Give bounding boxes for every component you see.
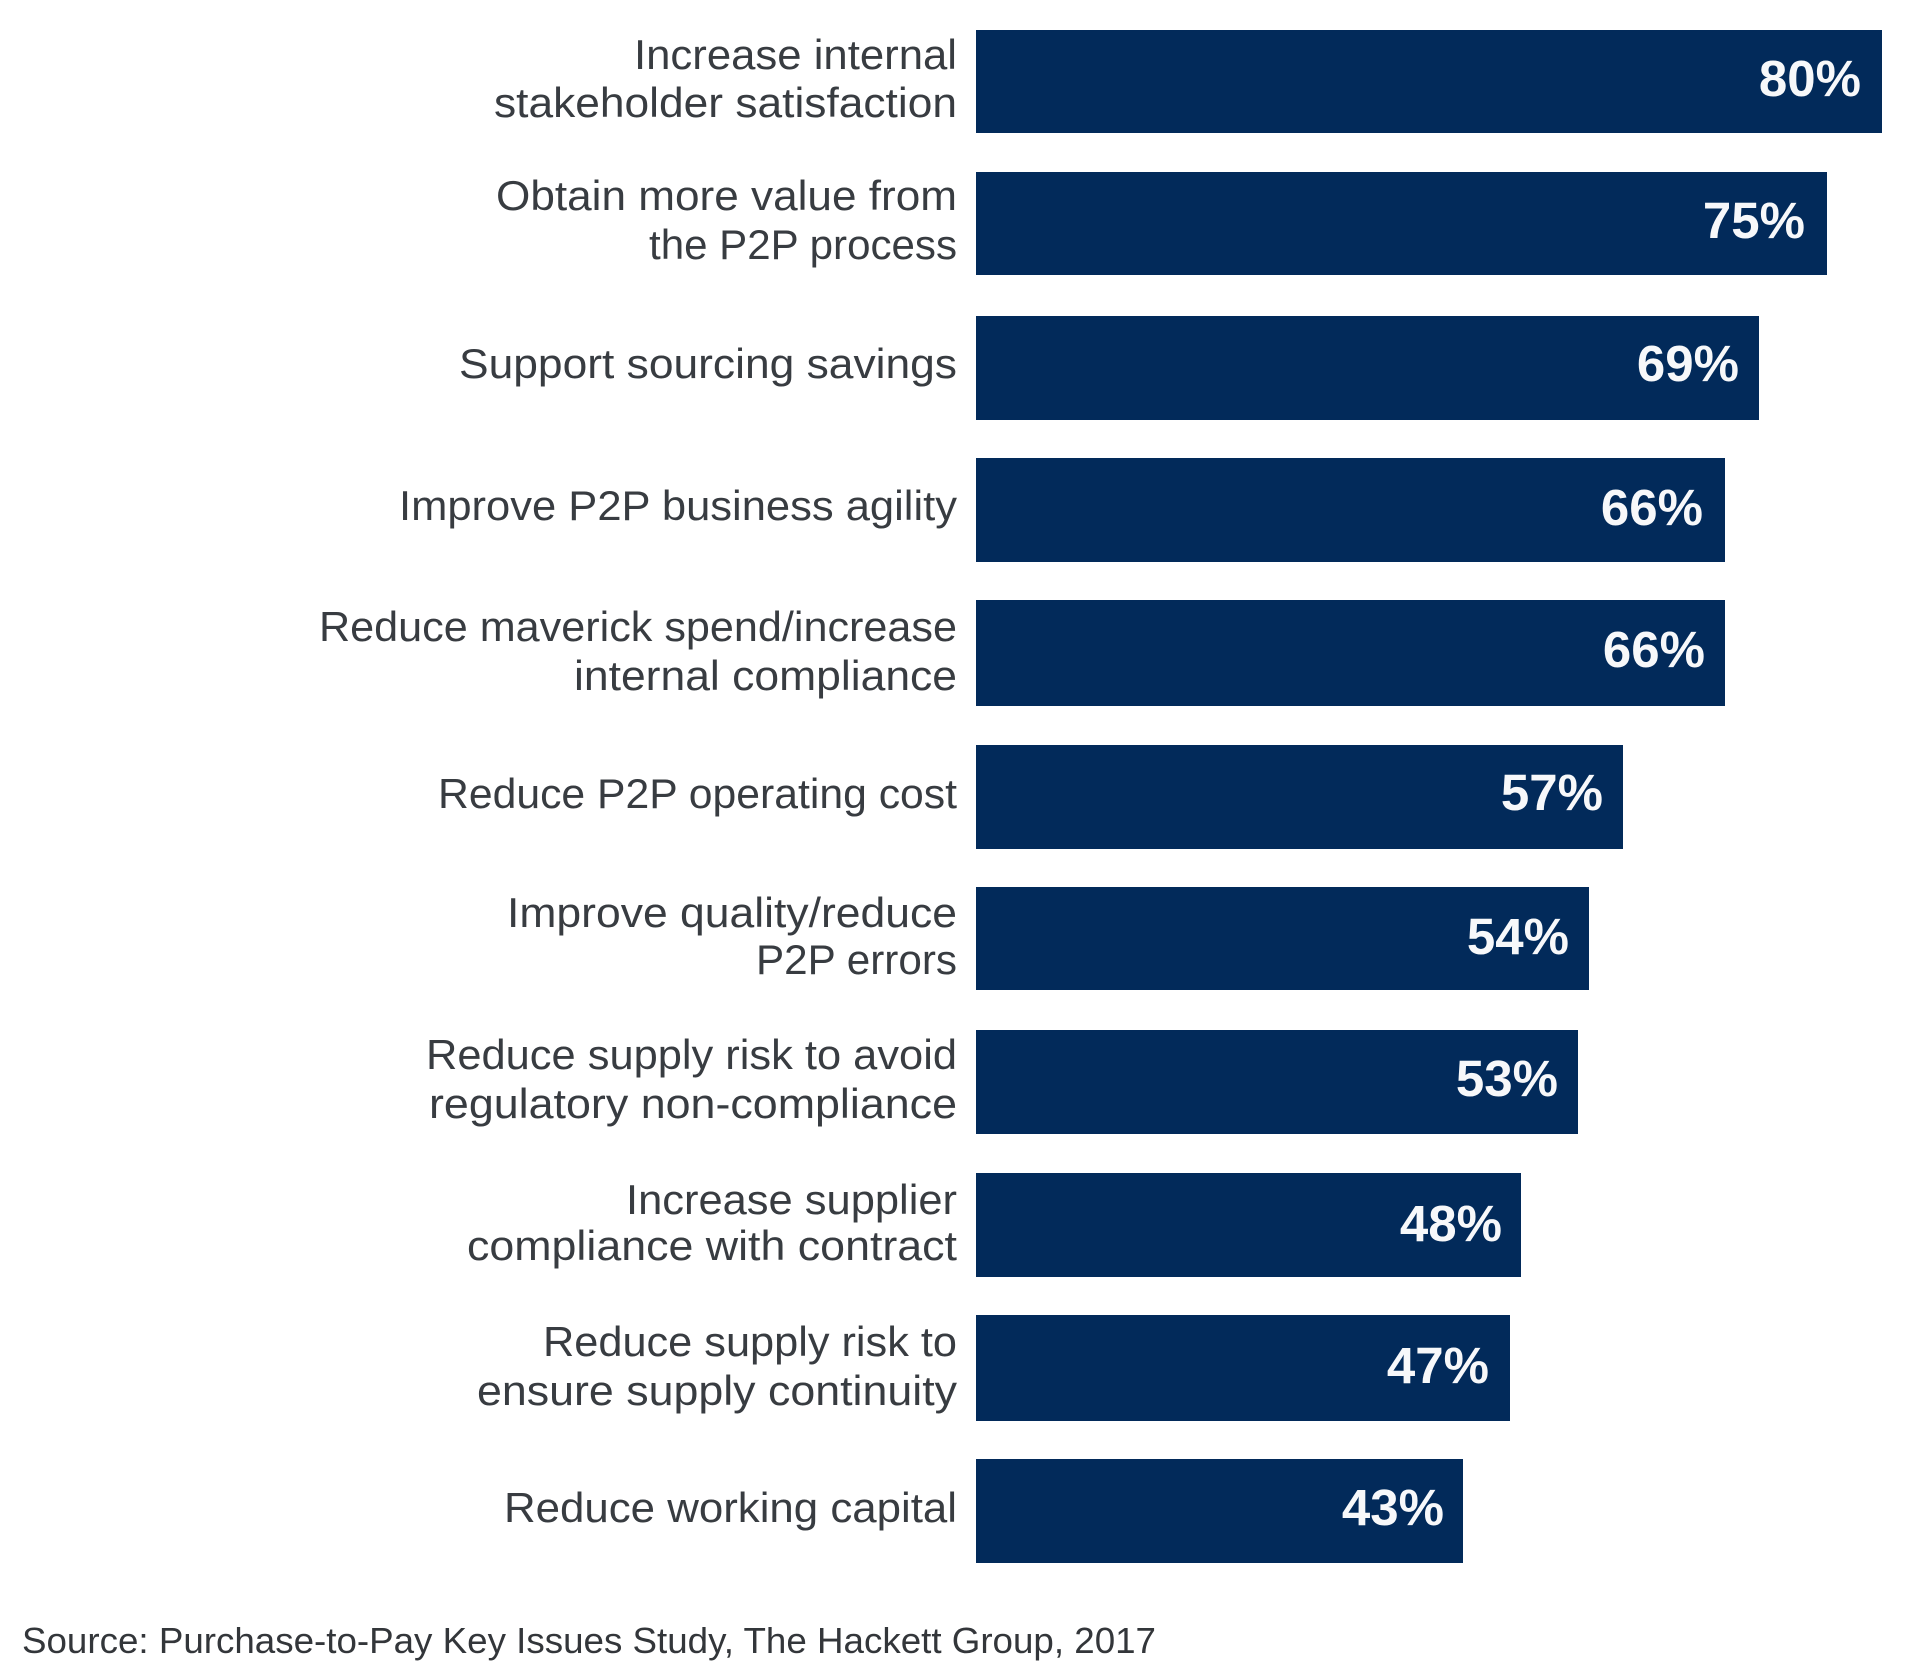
row: Improve P2P business agility 66% xyxy=(399,458,1725,562)
row: Support sourcing savings 69% xyxy=(459,316,1759,420)
row: Obtain more value from the P2P process 75% xyxy=(496,172,1827,275)
source note: Source: Purchase-to-Pay Key Issues Study, The Hackett Group, 2017 xyxy=(22,1620,1156,1661)
label: Obtain more value from xyxy=(496,172,957,219)
row: Reduce working capital 43% xyxy=(504,1459,1463,1563)
value: 80% xyxy=(1759,50,1861,107)
label line 2: compliance with contract xyxy=(467,1222,957,1269)
bar xyxy=(976,1315,1510,1421)
bar xyxy=(976,1459,1463,1563)
label: Reduce supply risk to xyxy=(543,1318,957,1365)
bar xyxy=(976,745,1623,849)
label line 2: the P2P process xyxy=(649,221,957,268)
label: Reduce P2P operating cost xyxy=(438,770,957,817)
bar xyxy=(976,30,1882,133)
bar xyxy=(976,316,1759,420)
label: Increase internal xyxy=(634,31,957,78)
value: 48% xyxy=(1400,1195,1502,1252)
row: Reduce supply risk to ensure supply continuity 47% xyxy=(477,1315,1510,1421)
label: Reduce working capital xyxy=(504,1484,957,1531)
bar xyxy=(976,887,1589,990)
label: Reduce supply risk to avoid xyxy=(426,1031,957,1078)
row: Reduce P2P operating cost 57% xyxy=(438,745,1623,849)
label: Improve quality/reduce xyxy=(507,889,957,936)
value: 54% xyxy=(1467,908,1569,965)
value: 43% xyxy=(1342,1479,1444,1536)
label: Improve P2P business agility xyxy=(399,482,957,529)
label: Support sourcing savings xyxy=(459,340,957,387)
value: 69% xyxy=(1637,335,1739,392)
row: Increase internal stakeholder satisfaction 80% xyxy=(494,30,1882,133)
bar xyxy=(976,600,1725,706)
label line 2: P2P errors xyxy=(756,936,957,983)
label: Increase supplier xyxy=(626,1176,957,1223)
label line 2: stakeholder satisfaction xyxy=(494,79,957,126)
value: 57% xyxy=(1501,764,1603,821)
value: 75% xyxy=(1703,192,1805,249)
bar xyxy=(976,1173,1521,1277)
row: Increase supplier compliance with contract 48% xyxy=(467,1173,1521,1277)
label line 2: regulatory non-compliance xyxy=(429,1080,957,1127)
value: 53% xyxy=(1456,1050,1558,1107)
bar xyxy=(976,458,1725,562)
value: 47% xyxy=(1387,1337,1489,1394)
bar xyxy=(976,172,1827,275)
value: 66% xyxy=(1601,479,1703,536)
label line 2: internal compliance xyxy=(574,652,957,699)
row: Reduce supply risk to avoid regulatory non-compliance 53% xyxy=(426,1030,1578,1134)
label line 2: ensure supply continuity xyxy=(477,1367,957,1414)
row: Reduce maverick spend/increase internal compliance 66% xyxy=(319,600,1725,706)
bar xyxy=(976,1030,1578,1134)
value: 66% xyxy=(1603,621,1705,678)
label: Reduce maverick spend/increase xyxy=(319,603,957,650)
row: Improve quality/reduce P2P errors 54% xyxy=(507,887,1589,990)
